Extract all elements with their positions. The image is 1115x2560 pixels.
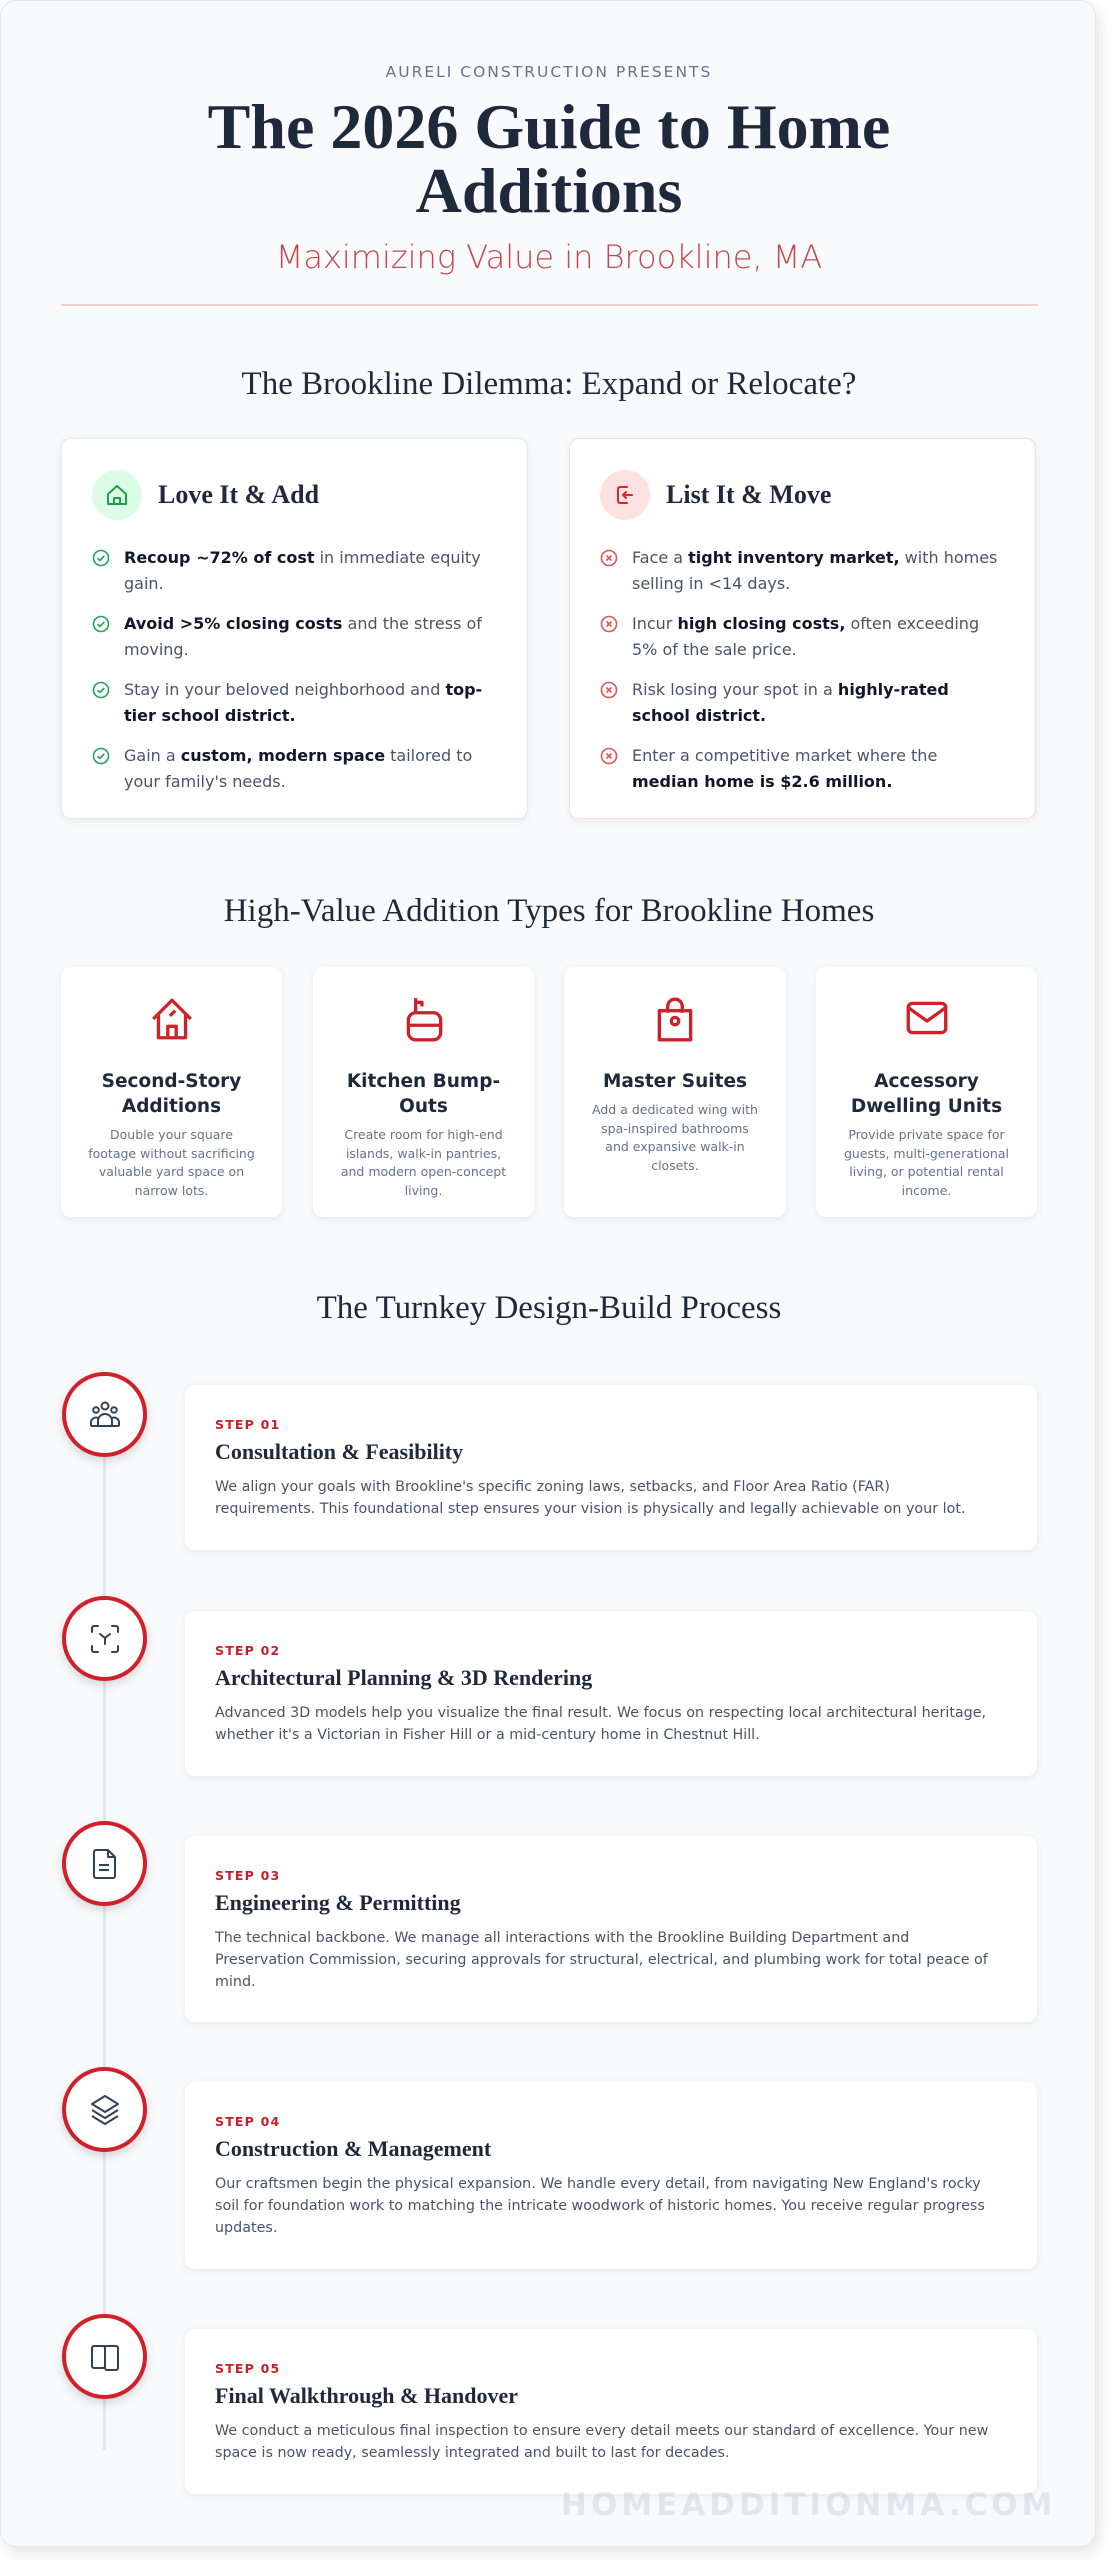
step 3 card: Engineering & Permitting [215, 1890, 461, 1915]
step 5 card: Final Walkthrough & Handover [215, 2383, 518, 2408]
title: The 2026 Guide to Home [208, 91, 890, 162]
heading: process: The Turnkey Design-Build Process [317, 1290, 781, 1326]
card: master suites: Add a dedicated wing with [592, 1102, 758, 1117]
step 2 card: Architectural Planning & 3D Rendering [215, 1665, 592, 1690]
card: master suites: and expansive walk-in [605, 1139, 745, 1154]
step 3 card [185, 1836, 1037, 2022]
card: kitchen: living. [405, 1182, 442, 1198]
step 2 card: whether it's a Victorian in Fisher Hill or a mid-century home in Chestnut Hill. [215, 1727, 760, 1743]
step 4 icon [62, 2067, 147, 2152]
card: second-story: Double your square [110, 1127, 233, 1142]
step 3 card: STEP 03 [215, 1868, 280, 1883]
step 3 card: mind. [215, 1974, 256, 1990]
title [208, 91, 890, 226]
card: second-story: Additions [122, 1096, 221, 1117]
step 1 card: We align your goals with Brookline's specific zoning laws, setbacks, and Floor Area Ratio (FAR) [215, 1479, 890, 1495]
step 2 card [185, 1611, 1037, 1776]
card: ADU: income. [902, 1182, 951, 1198]
step 3 icon [62, 1821, 147, 1906]
card heading: love it: Love It & Add [158, 480, 319, 509]
step 5 icon [62, 2314, 147, 2399]
bullet list: cons: Incur high closing costs, often exceeding 5% of the sale price. [632, 614, 979, 658]
heading: addition types: High-Value Addition Types for Brookline Homes [224, 893, 874, 929]
card: kitchen [313, 967, 534, 1217]
step 5 card: STEP 05 [215, 2361, 280, 2376]
step 5 card [185, 2329, 1037, 2494]
step 4 card: updates. [215, 2220, 277, 2236]
card: master suites: Master Suites [603, 1071, 747, 1092]
bullet list: pros: Avoid >5% closing costs and the stress of moving. [124, 614, 482, 658]
card heading: love it [92, 470, 319, 520]
step 5 card: space is now ready, seamlessly integrated and built to last for decades. [215, 2445, 729, 2461]
step 2 card: Advanced 3D models help you visualize the final result. We focus on respecting local architectural heritage, [215, 1705, 986, 1721]
step 4 card [185, 2082, 1037, 2269]
bullet list: cons [600, 548, 997, 790]
step 1 card [185, 1385, 1037, 1550]
bullet list: pros: Stay in your beloved neighborhood and top-tier school district. [124, 680, 482, 724]
bullet list: pros: Recoup ~72% of cost in immediate equity gain. [124, 548, 481, 592]
card: ADU: guests, multi-generational [844, 1146, 1009, 1160]
step 1 card: requirements. This foundational step ensures your vision is physically and legally achievable on your lot. [215, 1501, 966, 1517]
card: second-story [61, 967, 282, 1217]
card: kitchen: islands, walk-in pantries, [346, 1146, 501, 1160]
step 3 card: Preservation Commission, securing approvals for structural, electrical, and plumbing work for total peace of [215, 1952, 988, 1968]
card heading: list it: List It & Move [666, 480, 831, 509]
step 4 card: Construction & Management [215, 2136, 491, 2161]
bullet list: cons: Risk losing your spot in a highly-rated school district. [632, 680, 949, 724]
bullet list: pros: Gain a custom, modern space tailored to your family's needs. [124, 746, 472, 790]
heading: dilemma: The Brookline Dilemma: Expand or Relocate? [242, 366, 856, 402]
step 5 card: We conduct a meticulous final inspection to ensure every detail meets our standard of excellence. Your new [215, 2423, 988, 2439]
subtitle: Maximizing Value in Brookline, MA [276, 238, 822, 276]
step 4 card: Our craftsmen begin the physical expansion. We handle every detail, from navigating New England's rocky [215, 2176, 981, 2192]
card: ADU: living, or potential rental [849, 1164, 1004, 1179]
watermark: HOMEADDITIONMA.COM [561, 2487, 1056, 2523]
card: ADU: Accessory [874, 1071, 979, 1092]
step 4 card: soil for foundation work to matching the intricate woodwork of historic homes. You receive regular progress [215, 2198, 985, 2214]
card: ADU: Dwelling Units [851, 1096, 1002, 1117]
title: Additions [416, 155, 682, 226]
card: kitchen: Outs [399, 1096, 448, 1117]
step 4 card: STEP 04 [215, 2114, 280, 2129]
card: second-story: narrow lots. [135, 1182, 208, 1198]
card: master suites: closets. [651, 1158, 699, 1172]
card: second-story: footage without sacrificing [88, 1146, 255, 1160]
bullet list: pros [92, 548, 482, 790]
step 1 icon [62, 1372, 147, 1457]
step 1 card: STEP 01 [215, 1417, 280, 1432]
card: second-story: valuable yard space on [99, 1164, 244, 1179]
card: ADU: Provide private space for [848, 1127, 1005, 1142]
step 3 card: The technical backbone. We manage all interactions with the Brookline Building Department and [215, 1930, 909, 1946]
card: master suites [564, 967, 786, 1217]
card: second-story: Second-Story [102, 1071, 241, 1092]
card: kitchen: and modern open-concept [341, 1164, 506, 1179]
panel: list it & move [569, 438, 1036, 819]
header eyebrow: AURELI CONSTRUCTION PRESENTS [386, 63, 712, 81]
step 2 icon [62, 1596, 147, 1681]
card: master suites: spa-inspired bathrooms [601, 1120, 749, 1136]
bullet list: cons: Face a tight inventory market, with homes selling in <14 days. [632, 548, 997, 592]
panel: love it & add [61, 438, 528, 819]
card: kitchen: Kitchen Bump- [347, 1071, 500, 1092]
card heading: list it [600, 470, 831, 520]
card: kitchen: Create room for high-end [344, 1127, 503, 1142]
step 2 card: STEP 02 [215, 1643, 280, 1658]
step 1 card: Consultation & Feasibility [215, 1439, 463, 1464]
card: ADU [816, 967, 1037, 1217]
bullet list: cons: Enter a competitive market where the median home is $2.6 million. [632, 746, 937, 790]
